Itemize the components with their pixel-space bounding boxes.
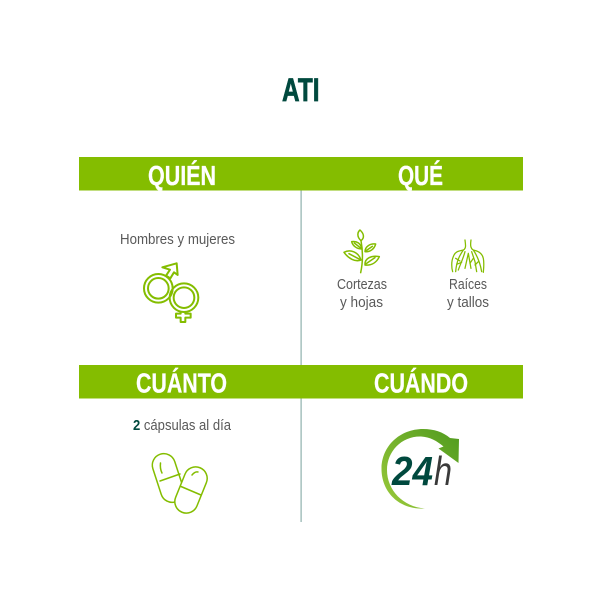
arrow ring xyxy=(382,429,459,509)
title: ATI xyxy=(282,72,320,108)
text: Cortezas y hojas: y hojas xyxy=(340,295,383,311)
text: 2 cápsulas al día: 2 cápsulas al día xyxy=(133,418,232,434)
icon: leaves xyxy=(344,230,379,273)
vertical divider xyxy=(300,190,302,522)
text: Cortezas y hojas xyxy=(337,277,387,311)
text: Raíces y tallos xyxy=(447,277,489,311)
text: Hombres y mujeres: Hombres y mujeres xyxy=(120,232,235,248)
icon: capsules xyxy=(149,451,211,517)
text: h: h xyxy=(434,448,452,494)
text: Raíces y tallos: y tallos xyxy=(447,295,489,311)
heading: CUÁNTO: CUÁNTO xyxy=(136,368,227,398)
text: 24: 24 xyxy=(391,448,433,494)
header bar: CUÁNTO / CUÁNDO xyxy=(79,365,523,398)
text: Cortezas y hojas: Cortezas xyxy=(337,277,387,293)
heading: QUÉ: QUÉ xyxy=(398,160,443,191)
text: Raíces y tallos: Raíces xyxy=(449,277,487,293)
header bar: QUIÉN / QUÉ xyxy=(79,157,523,191)
icon: roots xyxy=(452,240,484,272)
heading: QUIÉN: QUIÉN xyxy=(148,160,216,191)
icon: gender symbols xyxy=(144,263,198,322)
icon: 24h arrow xyxy=(382,429,459,509)
heading: CUÁNDO: CUÁNDO xyxy=(374,368,468,398)
